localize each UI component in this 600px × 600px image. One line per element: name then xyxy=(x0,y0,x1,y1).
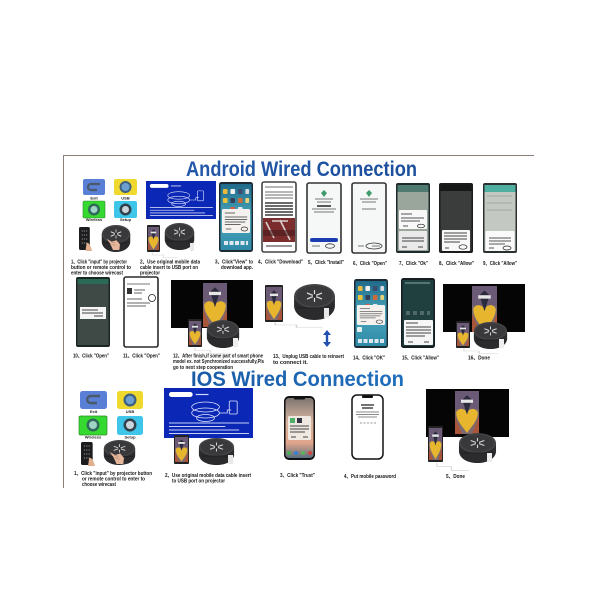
IOS step 1 input tiles xyxy=(79,391,143,440)
captions: IOS steps: choose wirecast xyxy=(82,482,116,488)
step 8 phone xyxy=(439,183,473,253)
captions: steps 14 to 16 xyxy=(353,356,490,362)
step 1 input tiles: Wireless xyxy=(86,217,103,222)
step 12 mirrored projection xyxy=(171,280,253,354)
step 14 phone xyxy=(354,279,388,348)
captions: IOS steps: 2、Use original mobile data cable insert xyxy=(165,473,251,479)
captions: row one: cable insert to USB port on xyxy=(140,265,198,271)
IOS step 3 phone xyxy=(284,396,315,460)
arrow: unplug and reinsert xyxy=(323,330,331,347)
step 6 phone xyxy=(352,183,386,253)
captions: steps 10 to 12: 11、Click "Open" xyxy=(123,354,160,360)
captions: row one: button or remote control to xyxy=(71,265,132,271)
captions: IOS steps: or remote control to enter to xyxy=(82,476,146,482)
step 15 phone xyxy=(401,278,435,348)
step 3 phone xyxy=(219,182,253,252)
step 10 phone xyxy=(76,277,110,347)
title: IOS Wired Connection: IOS Wired Connection xyxy=(191,368,404,391)
captions: IOS steps: to USB port on projector xyxy=(172,478,226,484)
captions: row one: 1、Click "input" by projector xyxy=(71,260,128,266)
frame lines xyxy=(63,155,534,488)
captions: steps 14 to 16: 16、Done xyxy=(468,356,490,362)
step 2 blue instruction screen xyxy=(146,181,216,219)
IOS step 2 blue instruction screen xyxy=(164,388,253,438)
step 13 caption: 13、Unplug USB cable to reinsert xyxy=(273,354,344,360)
captions: steps 14 to 16: 14、Click "OK" xyxy=(353,356,385,362)
step 5 phone xyxy=(307,183,341,253)
step 13 phone and projector xyxy=(265,284,335,328)
IOS step 2 phone and projector xyxy=(174,435,234,465)
captions: row one: enter to choose wirecast xyxy=(71,270,123,276)
step 2 phone and projector xyxy=(147,223,194,258)
title: Android Wired Connection: Android Wired Connection xyxy=(186,158,417,181)
captions: IOS steps: 4、Put mobile password xyxy=(344,474,396,480)
captions: row one: 9、Click "Allow" xyxy=(483,261,517,267)
step 11 phone xyxy=(124,277,158,347)
captions: row one: 3、Click"View" to xyxy=(215,260,254,266)
captions: steps 10 to 12 xyxy=(73,354,264,371)
step 4 phone xyxy=(262,182,296,252)
IOS step 5 mirrored projection xyxy=(426,389,509,470)
step 1 input tiles: Setup xyxy=(120,217,132,222)
captions: IOS steps: 5、Done xyxy=(446,474,465,480)
IOS step 1 input tiles: USB xyxy=(126,409,134,414)
captions: steps 10 to 12: go to next step cooperation xyxy=(173,365,233,371)
captions: row one xyxy=(71,260,517,276)
captions: row one: projector xyxy=(140,270,161,276)
step 1 input tiles: Exit xyxy=(90,196,98,200)
step 13 caption: to connect it. xyxy=(273,360,309,366)
step 9 phone xyxy=(483,183,517,253)
step 1 remote and projector xyxy=(79,225,130,252)
step 7 phone xyxy=(396,183,430,253)
captions: steps 14 to 16: 15、Click "Allow" xyxy=(402,356,439,362)
captions: row one: 8、Click "Allow" xyxy=(439,261,474,267)
step 13 caption xyxy=(273,354,344,366)
captions: row one: download app. xyxy=(221,265,253,271)
step 1 input tiles xyxy=(83,179,137,222)
captions: steps 10 to 12: model ex. not Synchronized successfully,Pls xyxy=(173,359,264,365)
IOS step 4 phone xyxy=(352,395,383,459)
captions: row one: 7、Click "Ok" xyxy=(399,261,428,267)
IOS step 1 input tiles: Setup xyxy=(124,434,136,440)
captions: IOS steps: 1、Click "input" by projector button xyxy=(74,471,152,477)
captions: row one: 5、Click "Install" xyxy=(308,260,344,266)
step 1 input tiles: USB xyxy=(121,196,130,200)
step 16 mirrored projection xyxy=(443,284,525,354)
captions: row one: 4、Click "Download" xyxy=(258,260,303,266)
IOS step 1 remote and projector xyxy=(81,440,135,466)
captions: row one: 2、Use original mobile data xyxy=(140,260,201,266)
captions: row one: 6、Click "Open" xyxy=(353,261,387,267)
captions: IOS steps xyxy=(74,471,465,488)
IOS step 1 input tiles: Exit xyxy=(90,409,98,414)
captions: IOS steps: 3、Click "Trust" xyxy=(280,473,315,479)
captions: steps 10 to 12: 12、After finish,if some part of smart phone xyxy=(173,354,263,360)
IOS step 1 input tiles: Wireless xyxy=(85,434,102,440)
captions: steps 10 to 12: 10、Click "Open" xyxy=(73,354,109,360)
